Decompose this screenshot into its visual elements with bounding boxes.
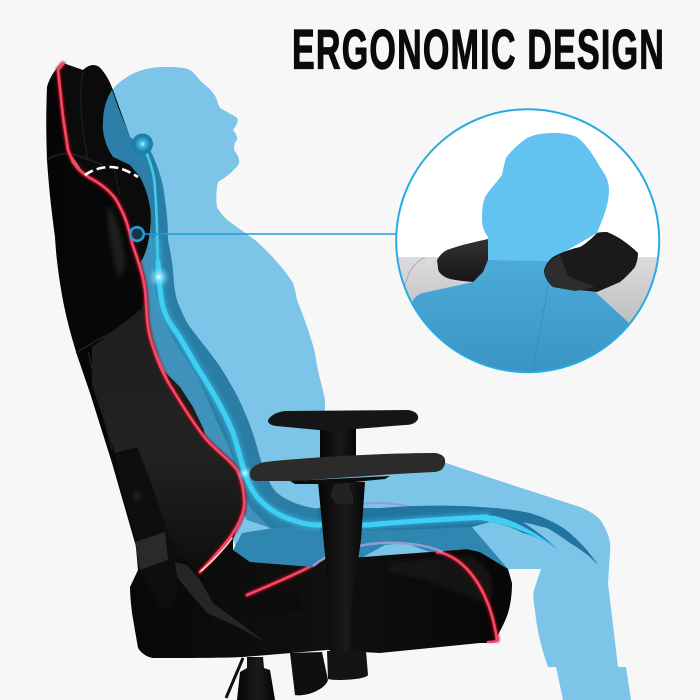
red glow <box>58 64 497 640</box>
left neck pad <box>437 239 488 282</box>
tilt housing <box>290 652 328 695</box>
bracket button <box>132 492 142 500</box>
upper lavender edge <box>363 503 410 507</box>
rear armrest post <box>320 428 356 458</box>
gas lift cover <box>237 657 275 700</box>
spine core lower <box>158 262 487 525</box>
front armrest pad <box>250 453 445 481</box>
seat cushion overlay <box>233 522 508 569</box>
detail circle <box>396 109 660 380</box>
seated body silhouette <box>103 67 631 700</box>
cyan spine line <box>143 145 487 525</box>
pointer line to detail circle <box>144 233 396 235</box>
lower leather panel <box>92 300 244 572</box>
backdrop seam <box>405 258 425 285</box>
glow: lower spine node <box>238 466 252 480</box>
head <box>482 133 609 262</box>
lower back seam <box>76 310 140 450</box>
headrest vertical seams <box>81 72 120 195</box>
spine taper tip <box>480 515 557 549</box>
circle background <box>396 109 659 372</box>
pad underside <box>290 476 390 484</box>
spine core upper <box>143 145 158 265</box>
side bracket <box>115 447 180 610</box>
rear armrest <box>268 410 418 458</box>
arm height button <box>331 483 353 504</box>
rear armrest pad <box>268 410 418 431</box>
chair base <box>226 652 328 700</box>
upper back sheen <box>108 205 125 276</box>
title: ERGONOMIC DESIGN <box>292 18 665 81</box>
headrest ring marker <box>130 227 144 241</box>
right neck pad <box>544 232 638 292</box>
arm column <box>318 482 368 677</box>
gaming chair <box>46 63 512 658</box>
lit segment <box>201 538 232 571</box>
spine glow <box>156 240 487 525</box>
chair backdrop <box>398 257 657 324</box>
neck ball marker <box>132 134 153 154</box>
red piping <box>58 64 497 642</box>
lift cable <box>226 658 243 698</box>
seat leather highlight <box>390 556 492 605</box>
circle outline <box>396 109 659 372</box>
headrest strap seam <box>47 153 103 165</box>
arm column base <box>327 651 368 680</box>
chair back and seat shell <box>46 63 512 658</box>
right pad face <box>545 255 595 291</box>
dashed headrest arc <box>85 167 138 177</box>
headrest <box>58 63 151 263</box>
center seam <box>533 285 548 372</box>
head overlap through silhouette <box>103 90 153 207</box>
seat sweep dark <box>317 506 598 565</box>
curved seat bracket <box>175 562 265 642</box>
medium blue back support <box>140 215 270 528</box>
front armrest <box>250 453 445 680</box>
shoulders <box>412 260 628 372</box>
dark spine band <box>140 150 320 535</box>
bracket highlight <box>135 532 168 570</box>
wedge behind red piping <box>165 372 205 438</box>
circle contents <box>396 133 660 380</box>
glow: lumbar node <box>148 266 170 288</box>
seat lever <box>240 593 302 613</box>
pink line <box>58 64 497 642</box>
seat cushion lavender edge <box>313 543 443 566</box>
